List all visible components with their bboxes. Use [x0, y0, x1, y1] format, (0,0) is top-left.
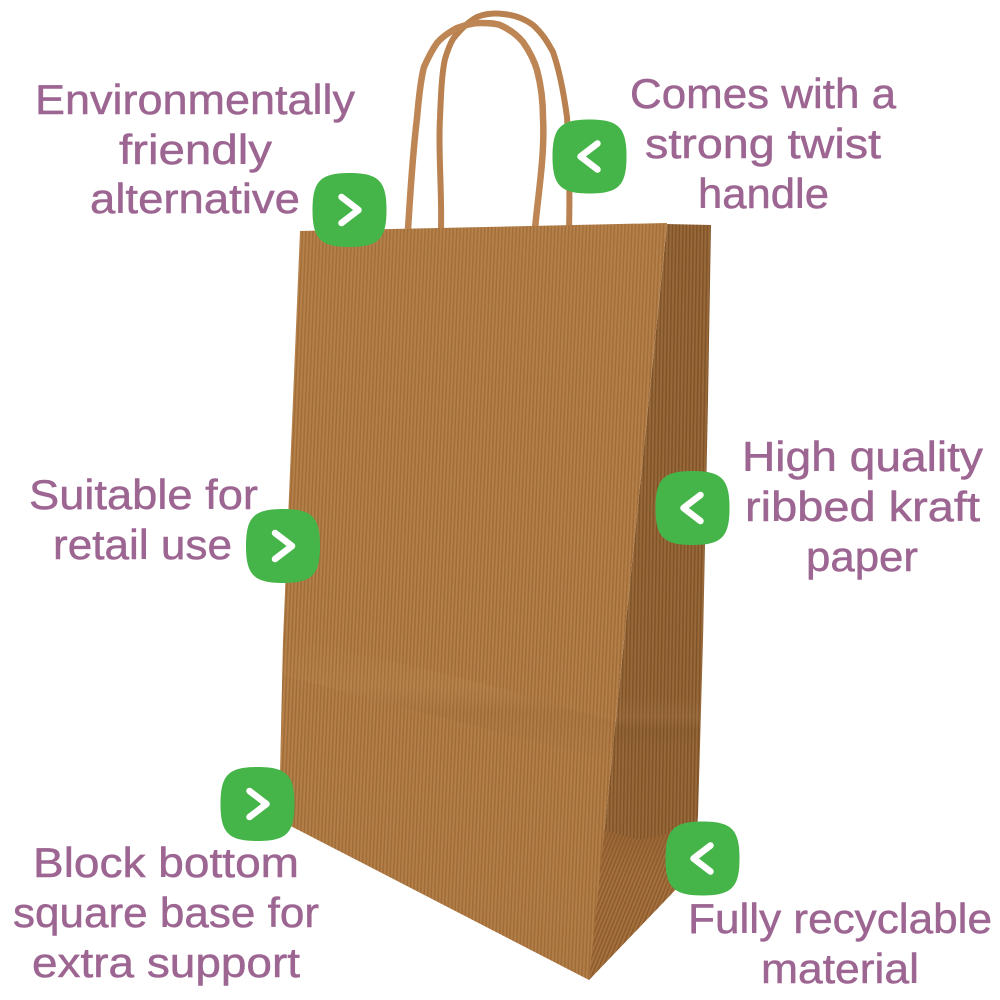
- text: comes with a strong twist handle: handle: [698, 170, 829, 217]
- text: block bottom square base for extra support: [13, 839, 319, 986]
- bag body: [279, 223, 711, 980]
- callout: twist handle: [552, 70, 897, 217]
- callout: ribbed kraft paper: [656, 433, 983, 580]
- text: comes with a strong twist handle: Comes with a: [630, 70, 897, 117]
- text: environmentally friendly alternative: Environmentally: [35, 76, 355, 123]
- callout: environmentally friendly: [35, 76, 386, 247]
- icon: right chevron badge: [312, 173, 386, 247]
- icon: left chevron badge: [552, 120, 626, 194]
- text: suitable for retail use: [29, 471, 258, 568]
- side gusset crease: [606, 695, 701, 750]
- text: fully recyclable material: Fully recyclable: [688, 895, 992, 942]
- text: comes with a strong twist handle: [630, 70, 897, 217]
- text: block bottom square base for extra support: square base for: [13, 889, 319, 936]
- icon: right chevron badge: [220, 767, 294, 841]
- front panel shading: [279, 223, 667, 980]
- icon: left chevron badge: [666, 822, 740, 896]
- bottom gusset fold blend: [589, 826, 698, 980]
- icon: right chevron badge: [246, 509, 320, 583]
- text: high quality ribbed kraft paper: High quality: [742, 433, 983, 480]
- callout: block bottom: [13, 767, 319, 986]
- callout: recyclable material: [666, 822, 992, 992]
- text: suitable for retail use: Suitable for: [29, 471, 258, 518]
- text: fully recyclable material: [688, 895, 992, 992]
- text: high quality ribbed kraft paper: paper: [806, 533, 918, 580]
- side gusset: [589, 224, 711, 980]
- bag handles: [408, 13, 569, 229]
- text: fully recyclable material: material: [761, 945, 919, 992]
- text: high quality ribbed kraft paper: ribbed kraft: [745, 483, 980, 530]
- text: suitable for retail use: retail use: [53, 521, 232, 568]
- text: environmentally friendly alternative: alternative: [90, 175, 300, 222]
- text: block bottom square base for extra support: Block bottom: [33, 839, 299, 886]
- front handle: [408, 23, 543, 229]
- text: environmentally friendly alternative: friendly: [119, 126, 272, 173]
- text: comes with a strong twist handle: strong twist: [645, 120, 881, 167]
- text: high quality ribbed kraft paper: [742, 433, 983, 580]
- callout: retail use: [29, 471, 320, 583]
- text: environmentally friendly alternative: [35, 76, 355, 222]
- front panel crease: [281, 635, 625, 765]
- bottom gusset fold: [589, 826, 698, 980]
- back handle: [439, 13, 569, 229]
- front panel: [279, 223, 667, 980]
- icon: left chevron badge: [656, 471, 730, 545]
- text: block bottom square base for extra support: extra support: [32, 939, 300, 986]
